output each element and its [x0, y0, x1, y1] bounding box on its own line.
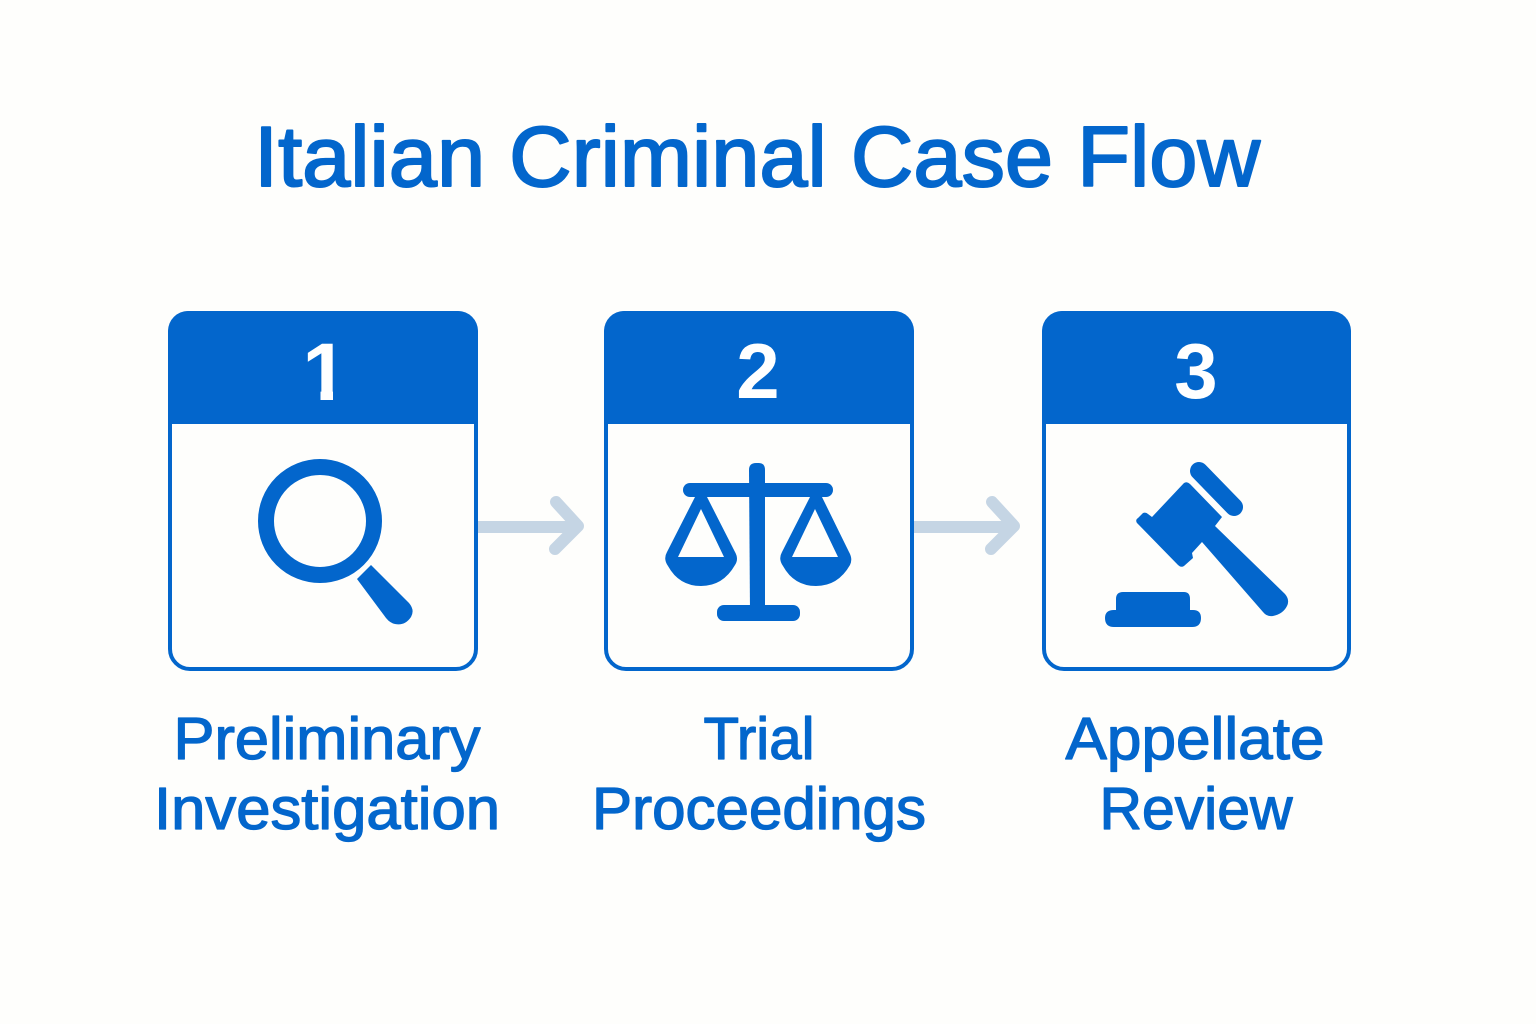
label: step 1: Preliminary: [174, 706, 481, 772]
step 1 header: [168, 311, 478, 424]
panel: step 2: [604, 311, 914, 669]
step 1 number: 1: [302, 327, 348, 418]
step 2 header: [604, 311, 914, 424]
panel: step 1: [168, 311, 478, 669]
label: step 3: [1066, 706, 1324, 842]
label: step 2: [592, 706, 926, 842]
title: Italian Criminal Case Flow: [254, 110, 1261, 205]
step 2 card outline: [606, 313, 912, 669]
arrow: step 2 to step 3: [914, 502, 1014, 549]
icon: magnifying glass: [266, 467, 413, 624]
step 2 number: 2: [736, 327, 780, 415]
panel: step 3: [1042, 311, 1351, 669]
label: step 2: Trial: [704, 706, 814, 772]
arrow: step 1 to step 2: [478, 502, 578, 549]
label: step 1: [154, 706, 500, 842]
label: step 1: Investigation: [154, 776, 500, 842]
step 3 header: [1042, 311, 1351, 424]
label: step 3: Review: [1100, 776, 1293, 842]
icon: scales of justice: [665, 463, 851, 621]
icon: gavel: [1105, 471, 1288, 627]
label: step 3: Appellate: [1066, 706, 1324, 772]
step 1 card outline: [170, 313, 476, 669]
label: step 2: Proceedings: [592, 776, 926, 842]
step 3 number: 3: [1174, 327, 1218, 415]
step 3 card outline: [1044, 313, 1349, 669]
